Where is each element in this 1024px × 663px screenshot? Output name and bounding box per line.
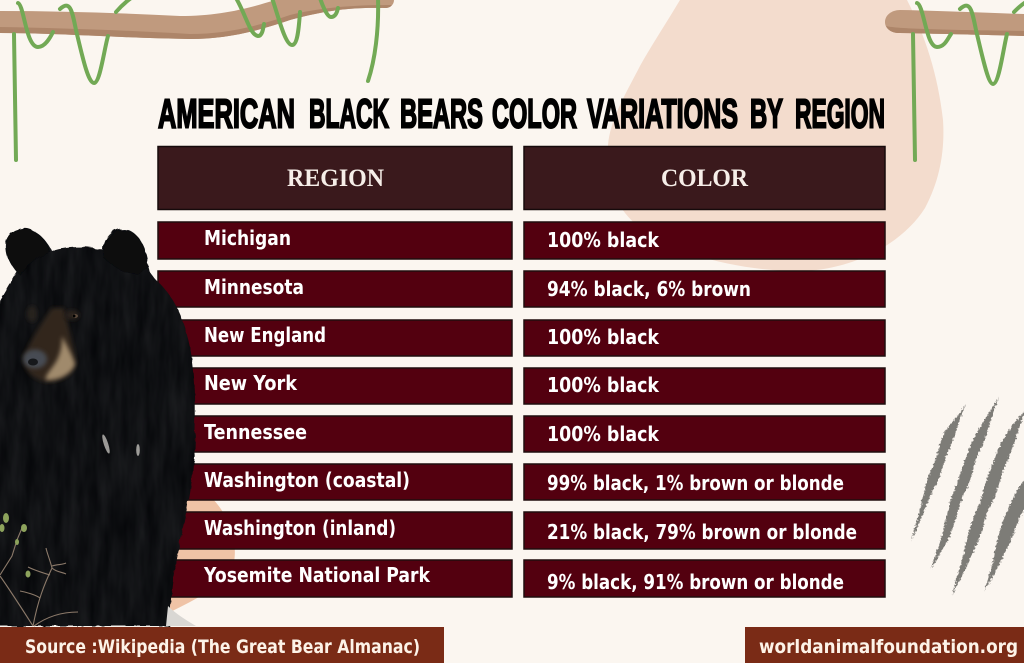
bear body <box>0 229 195 626</box>
claw scratches <box>911 397 1024 595</box>
header: color <box>524 146 885 210</box>
row: Michigan <box>158 222 885 259</box>
ears <box>7 230 147 275</box>
twig <box>0 528 78 626</box>
title: BEARS <box>400 90 483 136</box>
row: Michigan: Michigan <box>204 226 291 250</box>
row: New York: 100% black <box>547 373 660 397</box>
eyes <box>27 306 79 322</box>
title: BY <box>750 90 783 136</box>
row: Washington (inland) <box>158 512 885 549</box>
footer: website <box>745 627 1024 663</box>
row: Washington (coastal) <box>158 464 885 500</box>
row: New England: 100% black <box>547 325 660 349</box>
row: Minnesota: 94% black, 6% brown <box>547 277 751 301</box>
title <box>158 90 885 136</box>
vines: top left <box>14 0 378 160</box>
row: Washington (coastal): Washington (coastal) <box>204 468 410 492</box>
header: region: REGION <box>287 165 384 192</box>
title: COLOR <box>492 90 577 136</box>
row: New England: New England <box>204 323 326 347</box>
row: Yosemite National Park <box>158 560 885 597</box>
footer: source: Source :Wikipedia (The Great Bear Almanac) <box>25 636 420 658</box>
title: REGION <box>795 90 885 136</box>
table <box>158 146 885 597</box>
title: VARIATIONS <box>587 90 738 136</box>
header: region <box>158 146 512 210</box>
row: Yosemite National Park: 9% black, 91% brown or blonde <box>547 570 844 594</box>
row: Tennessee: 100% black <box>547 422 660 446</box>
row: Washington (inland): Washington (inland) <box>204 516 396 540</box>
decorative blob: top right <box>608 0 943 271</box>
row: Washington (inland): 21% black, 79% brown or blonde <box>547 520 857 544</box>
row: Tennessee: Tennessee <box>204 420 307 444</box>
branch: top right <box>885 10 1024 36</box>
decorative blob: behind bear <box>170 492 235 612</box>
row: Yosemite National Park: Yosemite National Park <box>203 563 431 587</box>
rock at bear's feet <box>166 606 196 626</box>
bear illustration <box>0 229 196 626</box>
row: Washington (coastal): 99% black, 1% brown or blonde <box>547 471 844 495</box>
row: Minnesota: Minnesota <box>204 275 304 299</box>
row: New York: New York <box>204 371 298 395</box>
chest marks <box>101 434 140 456</box>
twig buds <box>0 513 30 578</box>
title: AMERICAN <box>158 90 295 136</box>
vines: top right <box>913 2 1024 160</box>
row: Michigan: 100% black <box>547 228 660 252</box>
branch: top left <box>0 0 394 39</box>
row: Tennessee <box>158 416 885 452</box>
header: color: COLOR <box>661 165 749 192</box>
row: New England <box>158 320 885 356</box>
row: New York <box>158 368 885 404</box>
title: BLACK <box>309 90 389 136</box>
muzzle <box>23 308 76 382</box>
footer: source <box>0 627 444 663</box>
row: Minnesota <box>158 271 885 307</box>
